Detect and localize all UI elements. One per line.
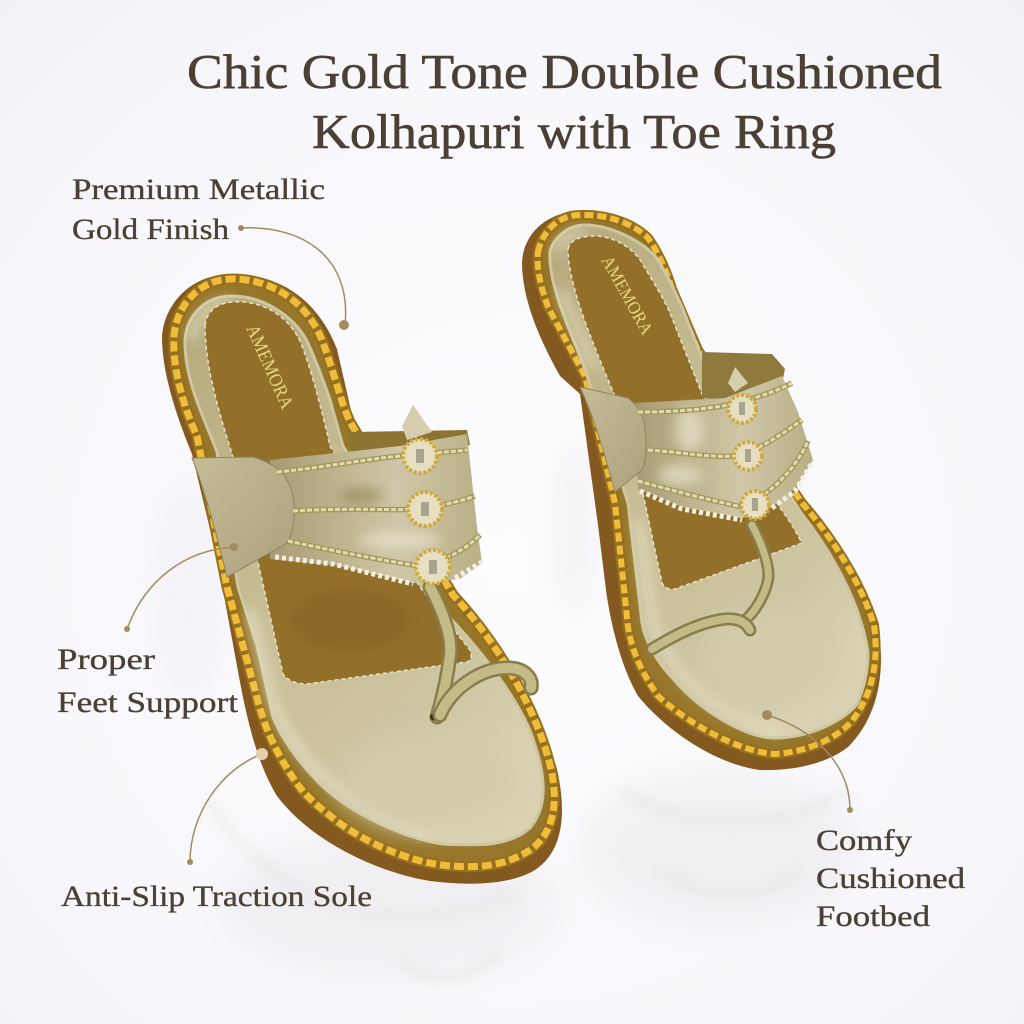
title: Kolhapuri with Toe Ring <box>312 104 836 159</box>
left toe strap <box>430 587 450 721</box>
callout: footbed: Comfy <box>816 824 912 857</box>
title <box>187 44 942 159</box>
callout: metallic finish: Gold Finish <box>72 213 229 246</box>
right sole <box>522 211 881 770</box>
callout: sole <box>61 748 372 913</box>
right strap <box>635 376 813 518</box>
callout: feet support <box>57 543 239 719</box>
left scalloped trim <box>275 557 482 584</box>
callout: feet support: Feet Support <box>57 686 239 719</box>
left toe ring <box>440 668 531 715</box>
callout: metallic finish: Premium Metallic <box>72 173 325 206</box>
right scalloped trim <box>640 463 812 520</box>
left braids <box>277 450 480 565</box>
right toe ring <box>652 619 750 649</box>
left leaf <box>402 405 432 440</box>
right studs <box>728 395 769 519</box>
callout: metallic finish <box>72 173 349 330</box>
right heel pad <box>568 236 802 589</box>
right sandal <box>522 211 881 770</box>
left heel pad <box>205 302 471 684</box>
left flap <box>192 457 294 577</box>
right braids <box>638 383 808 507</box>
callout: feet support: Proper <box>57 643 155 676</box>
left back heel strap <box>350 430 470 470</box>
callout: footbed: Footbed <box>816 900 930 933</box>
callout: sole: Anti-Slip Traction Sole <box>61 880 372 913</box>
left insole <box>185 296 543 845</box>
left strap <box>270 434 482 583</box>
callout: footbed <box>762 710 965 933</box>
reflections and shadows <box>155 440 860 980</box>
right logo: AMEMORA <box>598 252 657 338</box>
left logo: AMEMORA <box>241 321 297 412</box>
right toe strap <box>745 525 768 620</box>
left sandal <box>162 274 562 884</box>
right back heel strap <box>702 352 785 400</box>
left sole <box>162 274 562 884</box>
left studs <box>403 439 450 584</box>
right leaf <box>728 367 748 392</box>
callout: footbed: Cushioned <box>816 862 965 895</box>
title: Chic Gold Tone Double Cushioned <box>187 44 942 99</box>
right insole <box>550 225 868 738</box>
right gold rim <box>538 215 876 754</box>
right flap <box>580 387 646 492</box>
left gold rim <box>174 279 554 867</box>
